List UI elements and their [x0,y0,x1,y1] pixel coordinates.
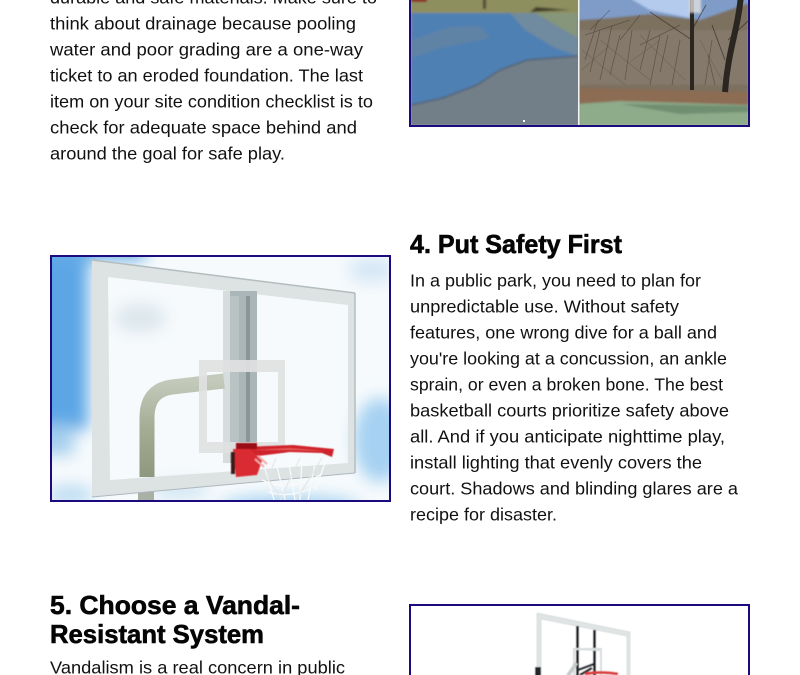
goal arm [147,381,224,477]
text block: safety paragraph: basketball courts prioritize safety above [410,400,729,420]
backboard frame [92,260,355,497]
heading: 5. Choose a Vandal-Resistant System: 5. Choose a Vandal- [50,590,300,620]
text block: site condition paragraph: think about drainage because pooling [50,14,356,34]
text block: safety paragraph: unpredictable use. Without safety [410,296,679,316]
rim [231,443,334,477]
text block: safety paragraph: you're looking at a concussion, an ankle [410,348,727,368]
heading: 5. Choose a Vandal-Resistant System [50,590,300,649]
image: vandal-resistant basketball system [410,605,749,675]
text block: safety paragraph: install lighting that evenly covers the [410,452,702,472]
heading: 5. Choose a Vandal-Resistant System: Resistant System [50,619,264,649]
text block: site condition paragraph: around the goal for safe play. [50,144,285,164]
text block: site condition paragraph [49,0,377,164]
text block: safety paragraph [410,270,738,524]
text block: site condition paragraph: water and poor grading are a one-way [49,40,363,60]
text block: safety paragraph: all. And if you anticipate nighttime play, [410,426,725,446]
text block: safety paragraph: features, one wrong dive for a ball and [410,322,717,342]
text block: site condition paragraph: ticket to an eroded foundation. The last [50,66,363,86]
image: weathered court and wooded site [410,0,749,126]
upright post [230,291,257,456]
shooter's square [199,360,285,453]
text block: site condition paragraph: item on your site condition checklist is to [50,92,373,112]
image: backboard and rim against sky [50,255,391,502]
text block: safety paragraph: In a public park, you need to plan for [410,270,701,290]
text block: safety paragraph: court. Shadows and blinding glares are a [410,478,738,498]
text block: safety paragraph: recipe for disaster. [410,504,557,524]
text block: safety paragraph: sprain, or even a broken bone. The best [410,374,723,394]
heading: 4. Put Safety First: 4. Put Safety First [410,229,622,259]
text block: site condition paragraph: check for adequate space behind and [50,118,357,138]
net [262,458,325,500]
